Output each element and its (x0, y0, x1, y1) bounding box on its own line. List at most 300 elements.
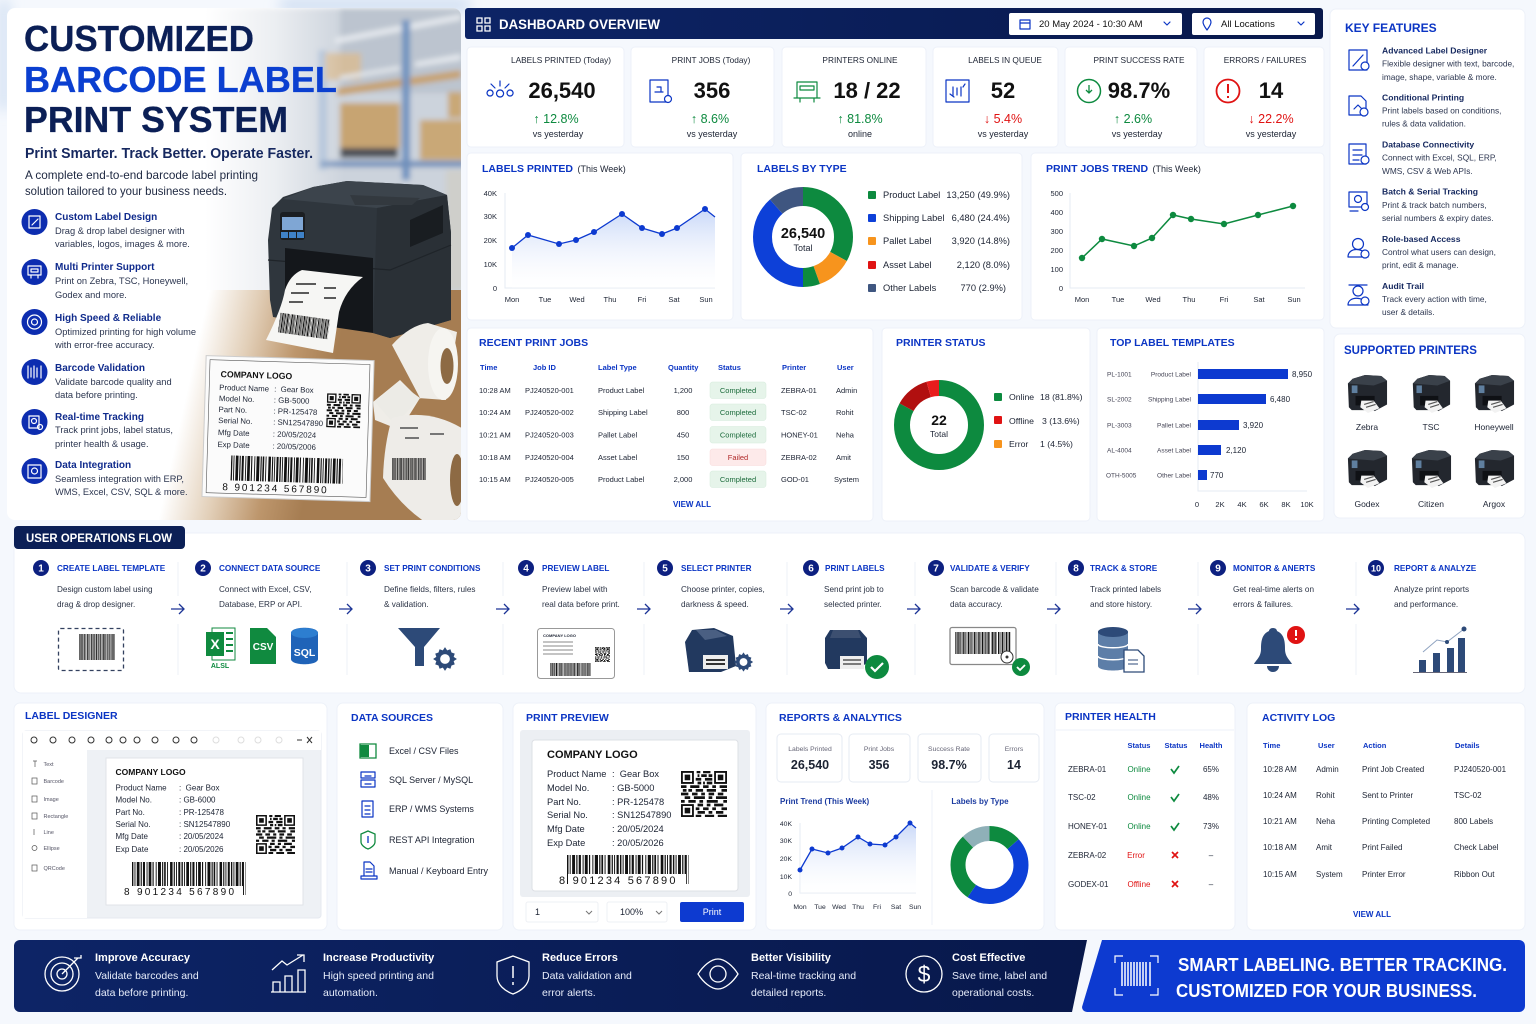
icon: hero printer (268, 181, 451, 338)
line chart: jobs: Sun (1287, 295, 1301, 304)
legend: printer status: 3 (13.6%) (1042, 416, 1080, 426)
step 8: TRACK & STORE (1090, 564, 1158, 573)
row 3: Pallet Label (598, 430, 638, 440)
labels by type donut (932, 790, 1021, 925)
benefit: increase productivity: automation. (323, 987, 378, 999)
bar chart: templates: 770 (1210, 471, 1224, 480)
arrow 2 (339, 604, 352, 614)
bar chart: templates: PL-1001 (1107, 372, 1132, 378)
row 3: Completed (720, 430, 756, 440)
preview label card: Product Name (547, 769, 606, 779)
feature: audit trail (1348, 281, 1487, 317)
line chart: jobs: Mon (1075, 295, 1089, 304)
bar chart: templates: 6,480 (1270, 395, 1291, 404)
step 1: Design custom label using (57, 585, 153, 594)
row 4: Failed (728, 453, 748, 462)
health row: godex-01: GODEX-01 (1068, 880, 1109, 889)
panel: printer status (882, 328, 1090, 521)
heading: user operations flow: USER OPERATIONS FLOW (26, 531, 173, 545)
title: CUSTOMIZED (24, 18, 254, 59)
feature: batch and serial tracking (1349, 187, 1494, 223)
icon: printer with check (825, 630, 889, 679)
table header (480, 363, 854, 372)
feature: custom label design: Drag & drop label designer with (55, 226, 185, 236)
row 1: Admin (836, 386, 857, 395)
health row: tsc-02: 48% (1203, 793, 1219, 802)
log row 3: Printing Completed (1362, 817, 1430, 826)
icons: excel csv sql (206, 628, 318, 670)
step 3: & validation. (384, 600, 429, 609)
source: manual entry (361, 862, 489, 879)
report stat: success rate: 98.7% (931, 758, 967, 772)
feature: conditional printing (1349, 93, 1501, 129)
log row 2: Rohit (1316, 791, 1335, 800)
bar chart: templates: 0 (1195, 500, 1199, 509)
benefit: improve accuracy: data before printing. (95, 987, 188, 999)
KPI: errors: vs yesterday (1246, 129, 1297, 139)
row 5: Completed (720, 475, 756, 484)
legend: printer status (994, 392, 1083, 449)
icon: barcode verified (950, 628, 1030, 676)
step 10: REPORT & ANALYZE (1394, 564, 1477, 573)
panel: key features (1330, 9, 1525, 328)
slogan: CUSTOMIZED FOR YOUR BUSINESS. (1176, 980, 1477, 1001)
panel: label designer (14, 703, 327, 930)
label card in hero: : PR-125478 (273, 407, 317, 417)
preview label card: : 20/05/2026 (612, 838, 664, 848)
panel: supported printers: SUPPORTED PRINTERS (1344, 345, 1477, 357)
log row 4: 10:18 AM (1263, 843, 1297, 852)
benefit: reduce errors: error alerts. (542, 987, 596, 999)
feature: multi printer support: Godex and more. (55, 290, 127, 300)
line chart: jobs: 300 (1050, 227, 1063, 236)
step 10: Analyze print reports (1394, 585, 1469, 594)
benefit: improve accuracy (45, 952, 199, 999)
feature: custom label design: variables, logos, images & more. (55, 239, 190, 249)
preview label card: : SN12547890 (612, 810, 671, 820)
panel: recent print jobs (467, 328, 873, 521)
feature: conditional printing: Conditional Printing (1382, 93, 1464, 103)
print trend chart: Thu (852, 904, 864, 911)
panel: reports and analytics (766, 703, 1044, 930)
row 2: 800 (677, 408, 689, 417)
printer: zebra (1348, 375, 1387, 432)
report stat: labels printed (777, 734, 842, 782)
log row 2: TSC-02 (1454, 791, 1482, 800)
legend: labels by type: Product Label (883, 190, 940, 200)
feature: real-time tracking: Track print jobs, label status, (55, 425, 173, 435)
label card in hero: Part No. (218, 405, 247, 415)
feature: database connectivity (1349, 140, 1497, 176)
designer label card: : Gear Box (179, 784, 219, 792)
line chart: jobs: 0 (1059, 284, 1063, 293)
printer: argox: Argox (1483, 499, 1506, 509)
step 3 (360, 560, 481, 671)
step 8: and store history. (1090, 600, 1152, 609)
print trend chart: 10K (780, 874, 792, 881)
designer canvas (23, 731, 321, 918)
panel: printer health (1055, 703, 1235, 930)
print trend chart: Fri (873, 904, 881, 911)
step 5: SELECT PRINTER (681, 564, 752, 573)
preview label card: Part No. (547, 797, 581, 807)
slogan (1176, 954, 1507, 1001)
health row: tsc-02: Online (1127, 793, 1151, 802)
panel: print preview: PRINT PREVIEW (526, 712, 609, 724)
arrow 9 (1346, 604, 1359, 614)
health row: tsc-02 (1068, 793, 1219, 802)
arrow 1 (171, 604, 184, 614)
donut: labels by type: 26,540 (781, 226, 825, 242)
step 5 (657, 560, 765, 672)
log header: Details (1455, 741, 1480, 750)
preview label card: Model No. (547, 783, 589, 793)
printer: zebra: Zebra (1356, 422, 1378, 432)
line chart: jobs (1050, 189, 1305, 304)
panel: labels printed chart: LABELS PRINTED (This Week) (482, 159, 626, 176)
hero background photo (0, 0, 470, 525)
benefit: cost effective: operational costs. (952, 987, 1034, 999)
benefit: reduce errors (497, 952, 632, 999)
bar chart: templates: PL-3003 (1107, 422, 1132, 430)
feature: role-based access (1348, 234, 1496, 270)
health row: godex-01: Offline (1128, 880, 1151, 889)
panel: recent print jobs: RECENT PRINT JOBS (479, 337, 588, 349)
designer toolbar (23, 731, 321, 750)
row 2: PJ240520-002 (525, 408, 574, 417)
feature: real-time tracking: printer health & usage. (55, 439, 149, 449)
feature: data integration: WMS, Excel, CSV, SQL & more. (55, 487, 188, 497)
legend: labels by type: Other Labels (883, 283, 937, 293)
title: PRINT SYSTEM (24, 99, 288, 140)
designer label card: Product Name (116, 784, 167, 792)
icon: printer with gear (685, 628, 753, 672)
report stat: print jobs: 356 (869, 758, 889, 772)
feature: data integration: Data Integration (55, 460, 131, 471)
panel: label designer: LABEL DESIGNER (25, 710, 118, 722)
arrow 7 (1047, 604, 1060, 614)
health header (1056, 730, 1234, 750)
designer label card: Model No. (116, 796, 152, 804)
log row 2: Sent to Printer (1362, 791, 1413, 800)
health row: honey-01: Online (1127, 822, 1151, 831)
row 5: GOD-01 (781, 475, 809, 484)
log row 1: 10:28 AM (1263, 765, 1297, 774)
tagline: Print Smarter. Track Better. Operate Faster. (25, 146, 313, 162)
donut: printer status (902, 388, 976, 462)
log header: Action (1363, 741, 1387, 750)
icon: report chart (1413, 626, 1467, 672)
benefit: better visibility: detailed reports. (751, 987, 826, 999)
row 4: PJ240520-004 (525, 453, 574, 462)
health row: godex-01 (1068, 880, 1214, 889)
report stat: errors: Errors (1005, 746, 1024, 753)
feature: batch and serial tracking: serial numbers & expiry dates. (1382, 213, 1494, 223)
designer tools sidebar: Image (44, 797, 59, 803)
log row 1: Admin (1316, 765, 1339, 774)
health row: zebra-01: ZEBRA-01 (1068, 765, 1107, 774)
step 3: Define fields, filters, rules (384, 585, 475, 594)
banner: benefits (14, 940, 1087, 1012)
printer: citizen (1412, 450, 1451, 509)
banner: smart labeling (1082, 940, 1525, 1012)
row 1: 1,200 (674, 386, 692, 395)
designer label card: : 20/05/2026 (179, 845, 224, 854)
line chart: jobs: 200 (1050, 246, 1063, 255)
donut: printer status: 22 (931, 412, 947, 428)
step 10: and performance. (1394, 600, 1458, 609)
step 4: Preview label with (542, 585, 608, 594)
preview label card: Exp Date (547, 838, 585, 848)
donut: labels by type (762, 196, 844, 278)
printed label leaving printer (266, 270, 363, 353)
feature: database connectivity: WMS, CSV & Web APIs. (1382, 166, 1473, 176)
printer: citizen: Citizen (1418, 499, 1444, 509)
row 5: System (834, 475, 859, 484)
line chart: jobs: Wed (1145, 295, 1161, 304)
panel: reports and analytics: REPORTS & ANALYTICS (779, 712, 902, 724)
panel: hero (0, 0, 470, 525)
health row: honey-01: 73% (1203, 822, 1219, 831)
preview label card (532, 740, 738, 891)
feature: multi printer support (22, 259, 188, 300)
feature: audit trail: Track every action with time, (1382, 294, 1487, 304)
log row 3: Neha (1316, 817, 1336, 826)
bar chart: templates: AL-4004 (1107, 448, 1132, 454)
step 6: selected printer. (824, 600, 882, 609)
log row 2: 10:24 AM (1263, 791, 1297, 800)
row 4 (479, 449, 852, 466)
designer label card: 8 901234 567890 (124, 887, 236, 898)
printer: godex (1348, 450, 1387, 509)
step 2: Database, ERP or API. (219, 600, 302, 609)
row 5: 2,000 (674, 475, 692, 484)
report stat: labels printed: 26,540 (791, 758, 829, 772)
benefit: reduce errors: Reduce Errors (542, 952, 618, 964)
step 3: 3 (365, 564, 371, 574)
panel: data sources: DATA SOURCES (351, 712, 433, 724)
log row 4 (1263, 843, 1499, 852)
step 8 (1068, 560, 1161, 672)
step 2: 2 (200, 564, 206, 574)
KPI: printers online (782, 47, 926, 147)
designer label card: : GB-6000 (179, 796, 216, 804)
line chart: jobs: Thu (1183, 295, 1195, 304)
arrow 3 (496, 604, 509, 614)
benefit: improve accuracy: Improve Accuracy (95, 952, 191, 964)
bar chart: templates: 10K (1300, 500, 1314, 509)
print trend chart: Tue (814, 904, 826, 911)
intro text: A complete end-to-end barcode label printing (25, 168, 258, 182)
log row 3 (1263, 817, 1493, 826)
row 3: 450 (677, 430, 689, 440)
step 1: 1 (38, 564, 44, 574)
step 7: 7 (933, 564, 939, 574)
legend: labels by type: 2,120 (8.0%) (957, 260, 1010, 270)
feature: real-time tracking (22, 409, 173, 449)
label card in hero (202, 356, 374, 502)
bar chart: templates: 3,920 (1243, 421, 1264, 430)
step 2 (195, 560, 321, 670)
legend: labels by type: Pallet Label (883, 236, 932, 246)
step 4: PREVIEW LABEL (542, 564, 609, 573)
step 6 (803, 560, 889, 679)
feature: advanced label designer: Advanced Label Designer (1382, 46, 1488, 56)
step 8: Track printed labels (1090, 585, 1161, 594)
bar chart: templates: 6K (1259, 500, 1269, 509)
row 1: ZEBRA-01 (781, 386, 817, 395)
designer tools sidebar: Text (44, 762, 54, 768)
row 3: PJ240520-003 (525, 430, 574, 440)
feature: barcode validation (22, 359, 172, 400)
designer label card: Exp Date (116, 845, 149, 854)
KPI: labels in queue (933, 47, 1058, 147)
label card in hero: : Gear Box (274, 385, 314, 395)
source: erp (362, 801, 474, 817)
panel: top label templates: TOP LABEL TEMPLATES (1110, 337, 1235, 349)
source: excel: Excel / CSV Files (389, 746, 459, 756)
step 5: darkness & speed. (681, 600, 749, 609)
KPI: labels in queue: LABELS IN QUEUE (968, 55, 1042, 65)
report stat: print jobs: Print Jobs (864, 746, 895, 753)
heading: dashboard overview: DASHBOARD OVERVIEW (499, 17, 660, 32)
feature: custom label design: Custom Label Design (55, 212, 157, 223)
log row 4: Amit (1316, 843, 1333, 852)
row 1: PJ240520-001 (525, 386, 574, 395)
control: copies: 1 (535, 907, 540, 917)
feature: multi printer support: Print on Zebra, TSC, Honeywell, (55, 276, 188, 286)
labels by type donut: Labels by Type (951, 797, 1009, 806)
print trend chart: 30K (780, 838, 792, 845)
source: manual entry: Manual / Keyboard Entry (389, 866, 489, 876)
print trend chart: 0 (788, 891, 792, 898)
KPI: printers online: online (848, 129, 872, 139)
log row 5: Ribbon Out (1454, 870, 1495, 879)
preview label card: 8 901234 567890 (559, 875, 678, 887)
source: sql: SQL Server / MySQL (389, 775, 473, 785)
feature: advanced label designer: Flexible designer with text, barcode, (1382, 58, 1514, 68)
panel: printer health: PRINTER HEALTH (1065, 711, 1156, 723)
line chart: jobs: 100 (1050, 265, 1063, 274)
log row 3: 10:21 AM (1263, 817, 1297, 826)
designer label card: Part No. (116, 808, 145, 817)
source: rest api: REST API Integration (389, 835, 474, 845)
step 1: drag & drop designer. (57, 600, 135, 609)
print trend chart: Wed (832, 904, 846, 911)
panel: labels printed chart (467, 153, 733, 320)
feature: conditional printing: Print labels based on conditions, (1382, 106, 1501, 116)
benefit: cost effective: $ (918, 961, 931, 987)
table header: Printer (782, 363, 806, 372)
icon: label preview: COMPANY LOGO (543, 633, 576, 638)
feature: conditional printing: rules & data validation. (1382, 119, 1466, 129)
printer: godex: Godex (1354, 499, 1380, 509)
designer tools sidebar: QRCode (44, 866, 65, 872)
KPI: print jobs: vs yesterday (687, 129, 738, 139)
row 3: Neha (836, 430, 855, 440)
row 1: 10:28 AM (479, 386, 511, 395)
benefit: better visibility: Better Visibility (751, 952, 832, 964)
KPI: print success rate (1065, 47, 1197, 147)
KPI: print jobs: 356 (694, 78, 730, 103)
log row 5: System (1316, 870, 1343, 879)
table header: Label Type (598, 363, 637, 372)
line chart: labels: 20K (484, 236, 497, 245)
legend: labels by type: Asset Label (883, 260, 932, 270)
printer: argox (1475, 450, 1514, 509)
panel: labels by type: LABELS BY TYPE (757, 163, 847, 175)
bar chart: templates: 2K (1215, 500, 1225, 509)
legend: printer status: 18 (81.8%) (1040, 392, 1083, 402)
print trend chart: Sat (891, 904, 901, 911)
line chart: labels: Fri (638, 295, 647, 304)
benefit: cost effective: Cost Effective (952, 952, 1025, 964)
benefit: better visibility: Real-time tracking and (751, 970, 856, 982)
legend: labels by type: 770 (2.9%) (961, 283, 1006, 293)
label card in hero: : GB-5000 (274, 396, 310, 406)
step 9: errors & failures. (1233, 600, 1293, 609)
row 4: 10:18 AM (479, 453, 511, 462)
feature: role-based access: Role-based Access (1382, 234, 1461, 244)
label card in hero: 8 901234 567890 (222, 482, 329, 496)
preview label card: : GB-5000 (612, 783, 654, 793)
panel: print jobs trend: PRINT JOBS TREND (This Week) (1046, 159, 1201, 176)
arrow 4 (637, 604, 650, 614)
link: view all log: VIEW ALL (1353, 910, 1391, 919)
icon: database with document (1098, 627, 1144, 672)
date picker: 20 May 2024 - 10:30 AM (1039, 19, 1143, 30)
KPI: print jobs: PRINT JOBS (Today) (672, 55, 751, 65)
log row 1 (1263, 765, 1507, 774)
row 2: Shipping Label (598, 408, 648, 417)
feature: barcode validation: Barcode Validation (55, 363, 145, 374)
step 6: PRINT LABELS (825, 564, 885, 573)
legend: printer status: Error (1009, 439, 1028, 449)
report stat: errors (989, 734, 1039, 782)
KPI: labels in queue: 52 (991, 78, 1015, 103)
label card in hero: : 20/05/2024 (273, 430, 317, 440)
preview label card: : PR-125478 (612, 797, 664, 807)
donut: printer status: Total (930, 429, 948, 439)
KPI: labels printed: LABELS PRINTED (Today) (511, 55, 611, 65)
step 2: Connect with Excel, CSV, (219, 585, 312, 594)
preview label card: COMPANY LOGO (547, 749, 638, 761)
print trend chart: 40K (780, 821, 792, 828)
designer tools sidebar (23, 750, 87, 918)
step 7 (928, 560, 1039, 676)
step 2: CONNECT DATA SOURCE (219, 564, 321, 573)
icon: alert bell (1254, 626, 1305, 672)
icon: dashed label (58, 628, 124, 670)
row 4: Amit (836, 453, 852, 462)
health row: tsc-02: TSC-02 (1068, 793, 1096, 802)
row 4: ZEBRA-02 (781, 453, 817, 462)
bar chart: templates (1106, 362, 1314, 509)
label card in hero: Model No. (219, 394, 255, 404)
row 5 (479, 471, 859, 488)
bar chart: templates: 8,950 (1292, 370, 1313, 379)
bar chart: templates: SL-2002 (1107, 396, 1132, 404)
feature: audit trail: user & details. (1382, 307, 1435, 317)
line chart: labels: Wed (569, 295, 585, 304)
panel: top label templates (1097, 328, 1324, 521)
KPI: labels in queue: ↓ 5.4% (984, 112, 1022, 126)
table header: Status (718, 363, 741, 372)
step 3: SET PRINT CONDITIONS (384, 564, 481, 573)
icon: label rolls (373, 323, 465, 522)
feature: data integration (22, 458, 188, 497)
health row: godex-01: – (1209, 880, 1214, 889)
